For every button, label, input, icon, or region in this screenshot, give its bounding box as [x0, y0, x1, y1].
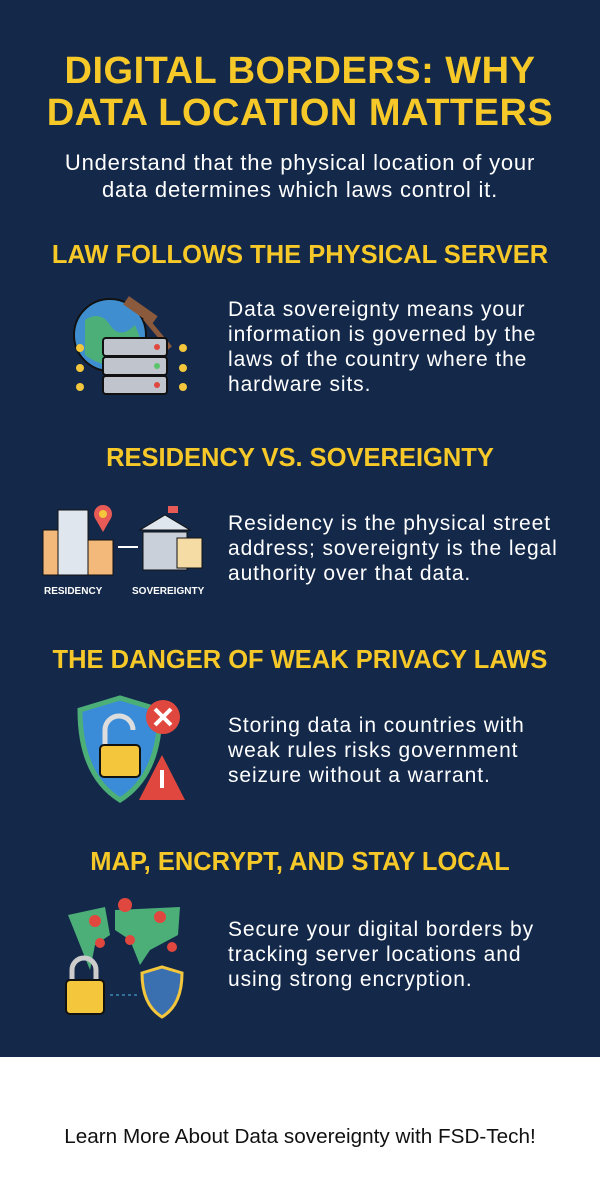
labels: RESIDENCY	[44, 586, 102, 597]
icon: shield with warning	[78, 695, 185, 803]
text: law: hardware sits.	[228, 373, 371, 396]
heading: map: MAP, ENCRYPT, AND STAY LOCAL	[90, 848, 510, 876]
text: danger: seizure without a warrant.	[228, 764, 491, 787]
title: DIGITAL BORDERS: WHY	[65, 50, 535, 92]
text: law: Data sovereignty means your	[228, 298, 525, 321]
text: map: tracking server locations and	[228, 943, 521, 966]
text: residency: Residency is the physical street	[228, 512, 551, 535]
text: law: information is governed by the	[228, 323, 536, 346]
text: danger	[228, 714, 525, 787]
heading: residency: RESIDENCY VS. SOVEREIGNTY	[106, 444, 494, 472]
title: DATA LOCATION MATTERS	[47, 92, 553, 134]
heading: danger: THE DANGER OF WEAK PRIVACY LAWS	[53, 646, 547, 674]
subtitle: Understand that the physical location of your	[65, 150, 535, 175]
icon: globe server gavel	[73, 296, 187, 395]
text: law	[228, 298, 536, 396]
icon: world map lock shield	[65, 898, 184, 1019]
footer: Learn More About Data sovereignty with FSD-Tech!	[64, 1125, 536, 1148]
subtitle	[65, 150, 535, 202]
text: map: using strong encryption.	[228, 968, 473, 991]
text: SOVEREIGNTY	[132, 586, 204, 597]
text: residency: authority over that data.	[228, 562, 471, 585]
text: danger: Storing data in countries with	[228, 714, 525, 737]
heading: law follows server: LAW FOLLOWS THE PHYSICAL SERVER	[52, 241, 548, 269]
subtitle: data determines which laws control it.	[102, 177, 498, 202]
text: residency: address; sovereignty is the legal	[228, 537, 558, 560]
text: map: Secure your digital borders by	[228, 918, 534, 941]
text: map	[228, 918, 534, 991]
title	[47, 50, 553, 134]
text: law: laws of the country where the	[228, 348, 527, 371]
text: residency	[228, 512, 558, 585]
text: danger: weak rules risks government	[228, 739, 518, 762]
icon: residency buildings	[42, 505, 202, 576]
